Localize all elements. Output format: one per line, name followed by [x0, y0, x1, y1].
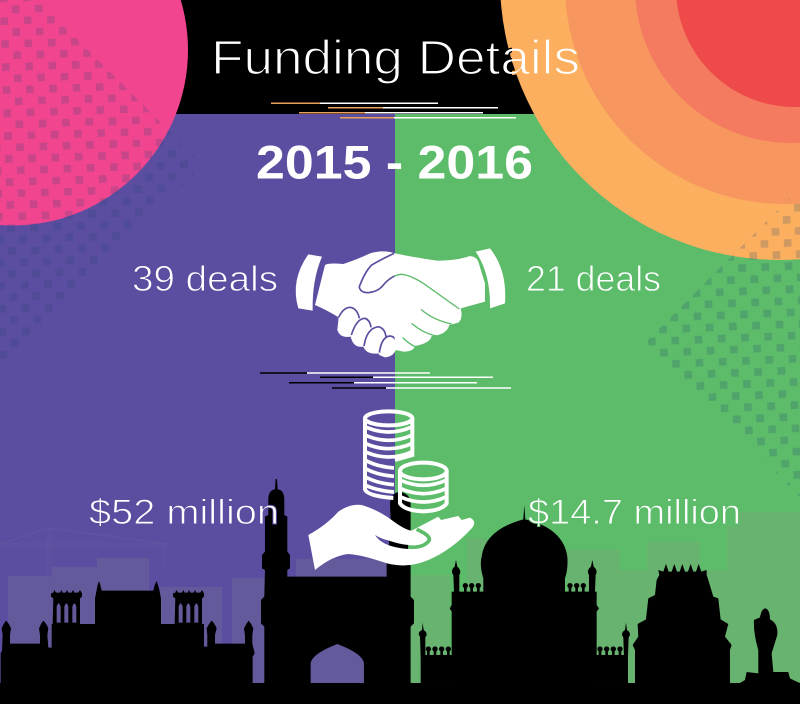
left deals label: 39 deals	[132, 258, 278, 299]
palm crease: black	[389, 541, 408, 549]
temple tower silhouette	[633, 564, 732, 683]
right cuff	[476, 248, 505, 308]
icon: open hand	[308, 505, 474, 570]
ground	[0, 683, 800, 704]
hand shape	[308, 505, 474, 570]
finger lines: green side	[394, 274, 460, 348]
dot pattern over pink circle	[0, 0, 168, 226]
short coin stack	[400, 463, 447, 511]
clasped hands	[315, 251, 485, 357]
icon: coin stacks	[365, 411, 447, 511]
right amount label: $14.7 million	[528, 493, 741, 532]
faint crane	[0, 528, 168, 577]
icon: handshake	[296, 248, 505, 357]
palace silhouette	[1, 581, 255, 683]
dot pattern: right	[646, 188, 800, 497]
right deals label: 21 deals	[526, 258, 661, 299]
left amount label: $52 million	[89, 493, 279, 532]
tall coin stack	[365, 411, 412, 498]
year heading: 2015 - 2016	[256, 136, 533, 188]
palm crease: green	[408, 529, 429, 547]
finger lines: purple side	[339, 253, 402, 353]
left cloister	[51, 590, 82, 624]
dot pattern: left	[0, 0, 203, 368]
divider lines under handshake	[260, 373, 511, 388]
left cuff	[296, 254, 322, 311]
title decorative lines	[271, 103, 516, 118]
background: green half	[395, 114, 800, 704]
domed tomb silhouette	[419, 505, 630, 683]
background: purple half	[0, 114, 395, 704]
background: black header band	[0, 0, 800, 114]
statue silhouette	[740, 608, 800, 683]
city silhouette	[0, 479, 800, 704]
right cloister	[173, 590, 204, 624]
faint city skyline	[0, 512, 800, 683]
concentric sun circles	[500, 0, 800, 260]
palm crease: purple	[375, 535, 389, 545]
minaret gate silhouette	[261, 479, 414, 683]
pink circle	[0, 0, 188, 226]
title: Funding Details	[211, 32, 580, 85]
